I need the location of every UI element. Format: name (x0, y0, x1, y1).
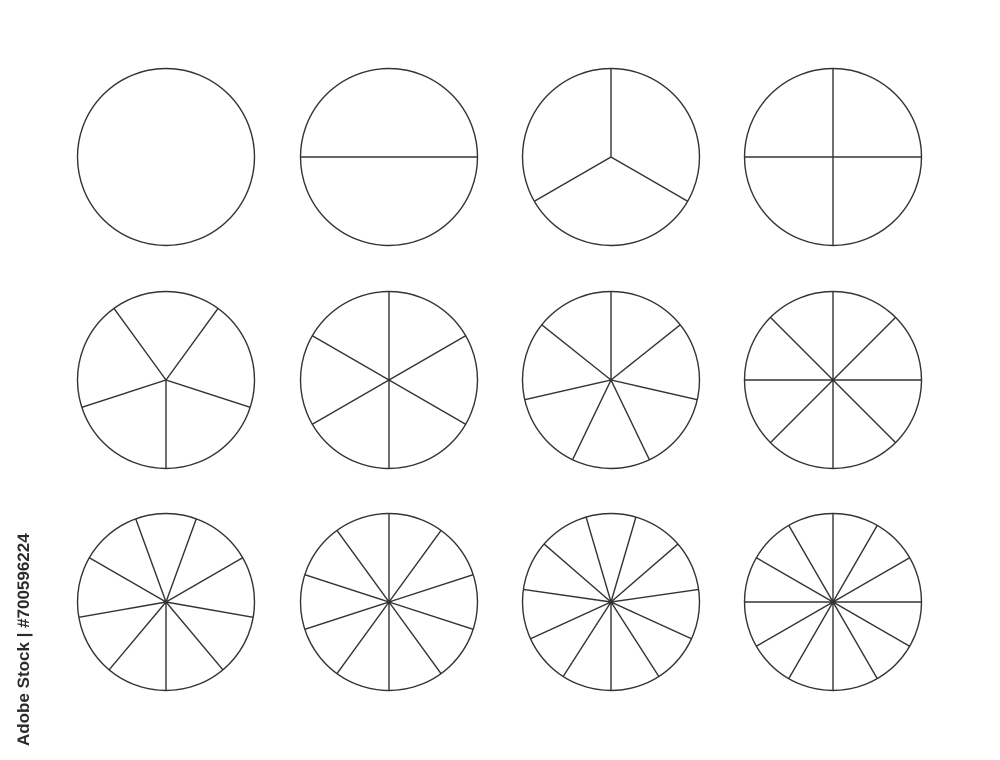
pie: 8 parts (744, 292, 922, 468)
pie: 3 parts (522, 68, 700, 246)
pie: 9 parts (78, 514, 254, 690)
pie: 5 parts (78, 292, 254, 468)
pie: 4 parts (744, 68, 922, 246)
pie: 2 parts (300, 68, 478, 246)
watermark text: Adobe Stock | #700596224 (14, 533, 33, 746)
pie: 10 parts (300, 514, 478, 690)
pie: 6 parts (300, 292, 478, 468)
pie: 1 part (78, 68, 254, 246)
pie: 7 parts (522, 292, 700, 468)
pie: 11 parts (522, 514, 700, 690)
pie: 12 parts (744, 514, 922, 690)
